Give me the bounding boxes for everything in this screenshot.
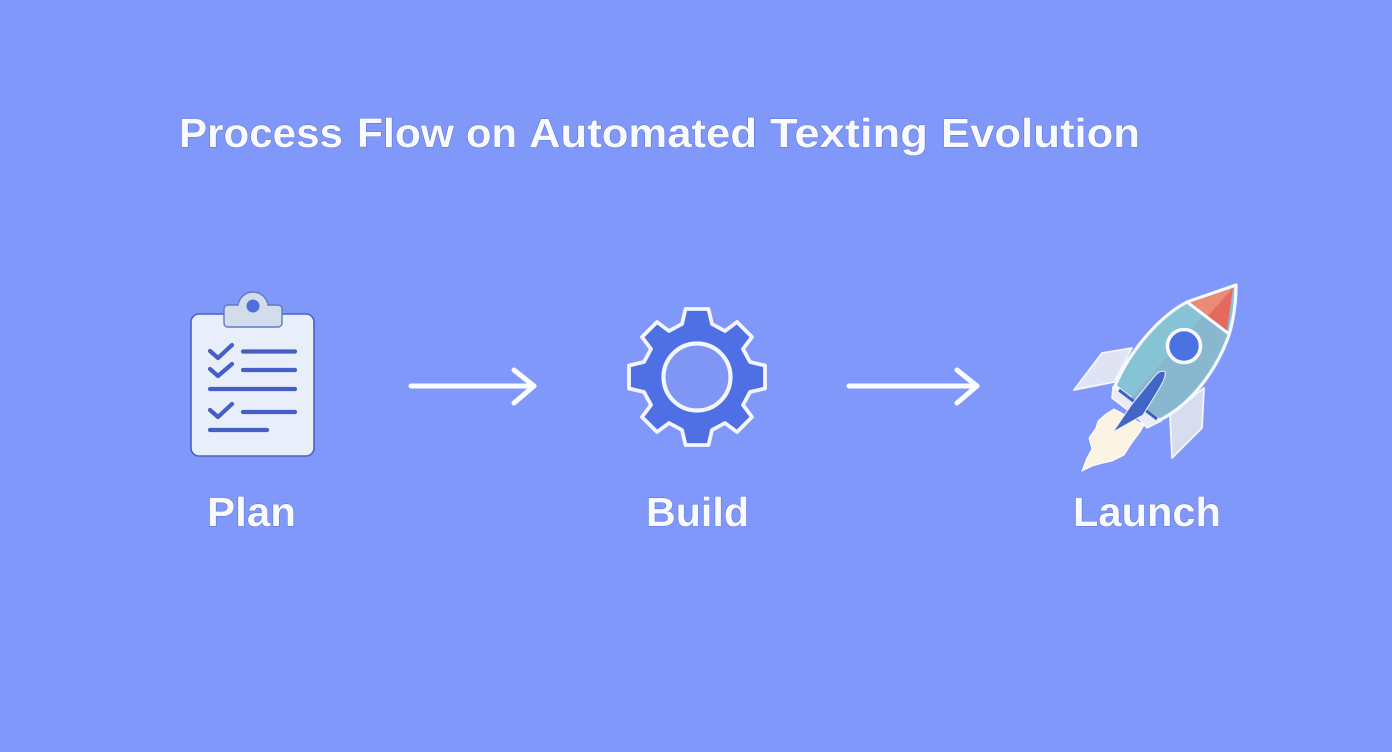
engine stripes <box>1119 390 1157 419</box>
title: Texting <box>770 110 928 156</box>
engine base <box>1112 387 1161 428</box>
icon: rocket <box>1074 285 1236 471</box>
label: build: Build <box>646 489 749 535</box>
arrow: plan to build <box>411 370 534 403</box>
window <box>1168 330 1200 362</box>
step 1: plan <box>191 292 314 535</box>
left fin <box>1074 348 1132 390</box>
step 3: launch <box>1073 285 1236 535</box>
flame <box>1082 409 1144 471</box>
centre fin <box>1113 371 1165 432</box>
label: launch: Launch <box>1073 489 1221 535</box>
body shading <box>1131 316 1227 418</box>
icon: gear <box>629 309 765 445</box>
label: plan: Plan <box>207 489 296 535</box>
nose cone <box>1189 288 1233 331</box>
right fin <box>1170 388 1204 458</box>
icon: clipboard <box>191 292 314 456</box>
arrow: build to launch <box>849 370 977 403</box>
rocket body <box>1115 285 1236 420</box>
title: on <box>466 110 517 156</box>
step 2: build <box>629 309 765 535</box>
title: Process <box>179 110 343 156</box>
title: Automated <box>529 110 757 156</box>
title: Evolution <box>941 110 1140 156</box>
title: Flow <box>357 110 454 156</box>
